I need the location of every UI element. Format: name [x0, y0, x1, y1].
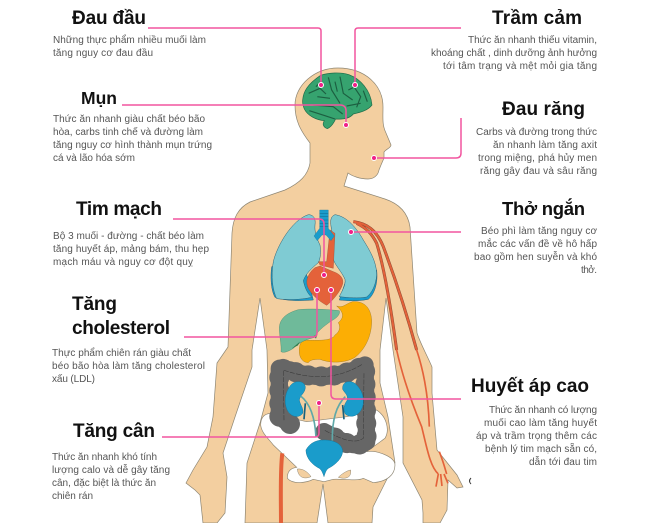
description: xấu (LDL) [52, 373, 95, 385]
leader line [148, 28, 324, 88]
description: mạch máu và nguy cơ đột quỵ [53, 257, 193, 268]
body silhouette [186, 68, 463, 523]
right arm arteries [397, 350, 448, 487]
arm arteries running from the chest [353, 222, 417, 350]
description: Carbs và đường trong thức [476, 127, 597, 138]
heading: Tăng cân [73, 421, 155, 442]
description: mắc các vấn đề về hô hấp [478, 237, 597, 250]
heading: Tim mạch [76, 199, 162, 220]
trachea [314, 210, 334, 241]
description: chiên rán [52, 491, 93, 502]
description: Thức ăn nhanh có lượng [489, 405, 597, 416]
kidneys [285, 382, 305, 416]
leader line [162, 400, 322, 437]
description: lượng calo và dễ gây tăng [52, 463, 170, 476]
description: Thức ăn nhanh giàu chất béo bão [53, 113, 205, 125]
description [53, 113, 212, 164]
liver [279, 309, 340, 352]
callout: Đau đầu [53, 8, 324, 88]
description: muối cao làm tăng huyết [484, 417, 597, 429]
description [52, 347, 205, 385]
callout: Thở ngắn [348, 198, 597, 276]
description: ăn nhanh làm tăng axit [493, 140, 597, 151]
lungs [272, 215, 321, 300]
heading: Đau đầu [72, 8, 146, 29]
heading: Mụn [81, 88, 117, 108]
description: tăng huyết áp, mảng bám, thu hẹp [53, 243, 209, 255]
leader line [184, 288, 320, 337]
heading: Tăng [72, 294, 117, 315]
callout: Tim mạch [53, 199, 326, 278]
description: tới tâm trạng và mệt mỏi gia tăng [443, 60, 597, 72]
hand mark [470, 478, 471, 484]
description [52, 452, 170, 502]
description: Những thực phẩm nhiều muối làm [53, 34, 206, 46]
callout: Tăng cholesterol [52, 288, 320, 385]
description: áp và trầm trọng thêm các [476, 430, 597, 442]
leader line [352, 28, 461, 88]
heading: Trầm cảm [492, 8, 582, 29]
description: trong miệng, phá hủy men [478, 152, 597, 164]
heading: Huyết áp cao [471, 376, 589, 397]
description: Béo phì làm tăng nguy cơ [481, 226, 597, 237]
leader line [122, 105, 348, 128]
description: bệnh lý tim mạch sẵn có, [485, 442, 597, 455]
leader line [328, 288, 461, 399]
descending aorta [318, 230, 335, 268]
thoracic organs [271, 210, 377, 363]
description [53, 34, 206, 59]
description: hòa, carbs tinh chế và đường làm [53, 126, 203, 138]
description: tăng nguy cơ hình thành mụn trứng [53, 140, 212, 151]
pelvis, colon, kidneys and bladder [261, 350, 448, 523]
description: tăng nguy cơ đau đầu [53, 47, 153, 59]
description [53, 230, 209, 268]
heart [307, 266, 343, 305]
leader line [173, 219, 326, 278]
callout: Mụn [53, 88, 348, 164]
description: béo bão hòa làm tăng cholesterol [52, 361, 205, 372]
description: răng gây đau và sâu răng [480, 166, 597, 177]
callout: Trầm cảm [352, 8, 597, 88]
description [476, 127, 597, 177]
bladder [306, 440, 343, 477]
description: Thức ăn nhanh khó tính [52, 452, 157, 463]
description [431, 34, 597, 72]
callout: Đau răng [372, 99, 597, 177]
heading: Thở ngắn [502, 198, 585, 219]
description: dẫn tới đau tim [529, 455, 597, 468]
pelvic bones [261, 410, 395, 483]
description: cân, đặc biệt là thức ăn [52, 478, 156, 489]
description [476, 405, 597, 468]
description: Bộ 3 muối - đường - chất béo làm [53, 230, 204, 242]
back of lungs [271, 263, 377, 301]
description: thở. [581, 264, 597, 276]
callout: Huyết áp cao [328, 288, 597, 468]
leader line [372, 118, 461, 160]
leader line [348, 230, 461, 234]
ureters [301, 396, 345, 441]
heading [72, 294, 170, 339]
description: Thực phẩm chiên rán giàu chất [52, 347, 191, 359]
brain [303, 73, 372, 129]
callout: Tăng cân [52, 400, 322, 502]
stomach [299, 302, 372, 363]
heading: cholesterol [72, 318, 170, 339]
description [474, 226, 597, 276]
heading: Đau răng [502, 99, 585, 120]
description: khoáng chất , dinh dưỡng ảnh hưởng [431, 47, 597, 59]
description: bao gồm hen suyễn và khó [474, 250, 597, 263]
left leg artery [281, 453, 282, 523]
colon [279, 364, 367, 445]
human body illustration [186, 68, 471, 523]
description: cá và lão hóa sớm [53, 153, 135, 164]
description: Thức ăn nhanh thiếu vitamin, [468, 34, 597, 46]
